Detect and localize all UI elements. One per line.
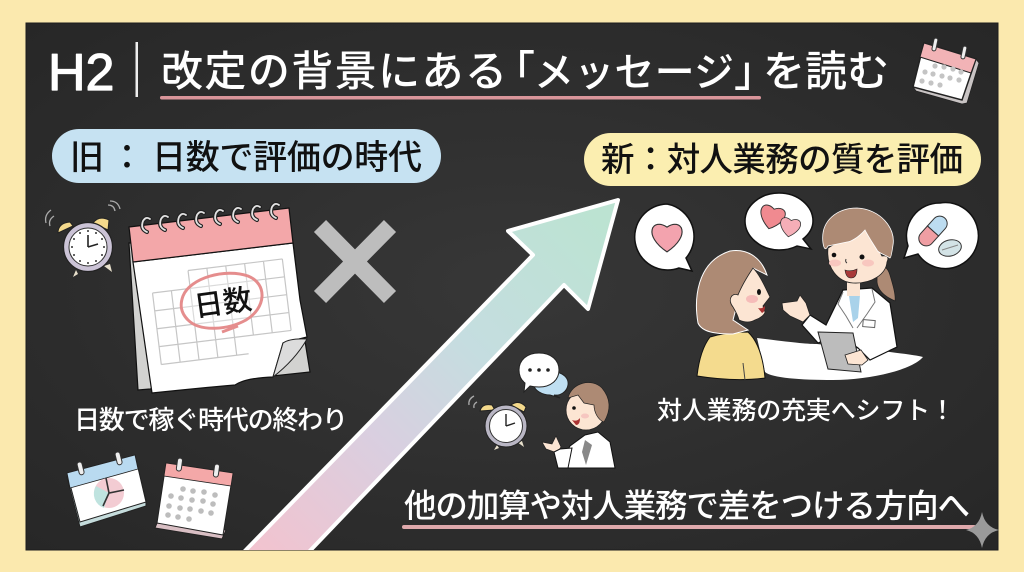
calendar rings: [142, 204, 279, 232]
icon: calendar with clock: [67, 451, 146, 527]
icon: alarm clock center: [469, 396, 527, 450]
title: メッセージ: [534, 51, 734, 95]
panel: old era heading pill: 日数で評価の時代: [152, 139, 422, 177]
calendar label: 日数: [192, 283, 254, 324]
conclusion underline: [402, 525, 976, 529]
arrow: gradient upward shift: [240, 200, 618, 556]
heading label H2: H2: [48, 44, 114, 102]
illustration: patient: [697, 251, 770, 380]
calendar rings highlight: [142, 204, 279, 232]
title: を読む: [763, 48, 889, 95]
panel: old era heading pill: 旧: [70, 139, 104, 177]
speech bubble: two hearts: [745, 193, 813, 250]
panel: old era heading pill: [52, 129, 441, 183]
icon: sparkle: [966, 512, 999, 548]
illustration: small pharmacist: [542, 383, 615, 468]
illustration: consulting desk: [757, 338, 923, 380]
speech bubble: heart: [635, 204, 694, 271]
conclusion text: 他の加算や対人業務で差をつける方向へ: [404, 488, 970, 524]
caption: old era: 日数で稼ぐ時代の終わり: [74, 405, 348, 435]
icon: alarm clock left: [46, 201, 120, 277]
illustration: pharmacist: [782, 208, 897, 372]
heading separator: [136, 42, 138, 97]
speech bubble: medicine: [904, 203, 978, 269]
icon: calendar with dots: [155, 458, 233, 539]
icon: header calendar: [913, 38, 979, 104]
calendar grid: [150, 259, 293, 364]
title: 改定の背景にある: [161, 48, 507, 95]
title: 」: [734, 48, 776, 95]
panel: old era heading pill: ：: [110, 139, 144, 177]
icon: big calendar with circled 日数: [129, 204, 310, 393]
panel: new era heading pill: 新：対人業務の質を評価: [601, 142, 963, 179]
icon: big X: [320, 226, 390, 297]
icon: chat bubbles: [519, 353, 568, 398]
title underline: [160, 96, 761, 100]
caption: new era: 対人業務の充実へシフト！: [657, 397, 955, 425]
red circle mark: [181, 273, 262, 332]
title: 「: [493, 48, 535, 95]
panel: new era heading pill: [584, 133, 981, 186]
page curl: [273, 339, 307, 377]
